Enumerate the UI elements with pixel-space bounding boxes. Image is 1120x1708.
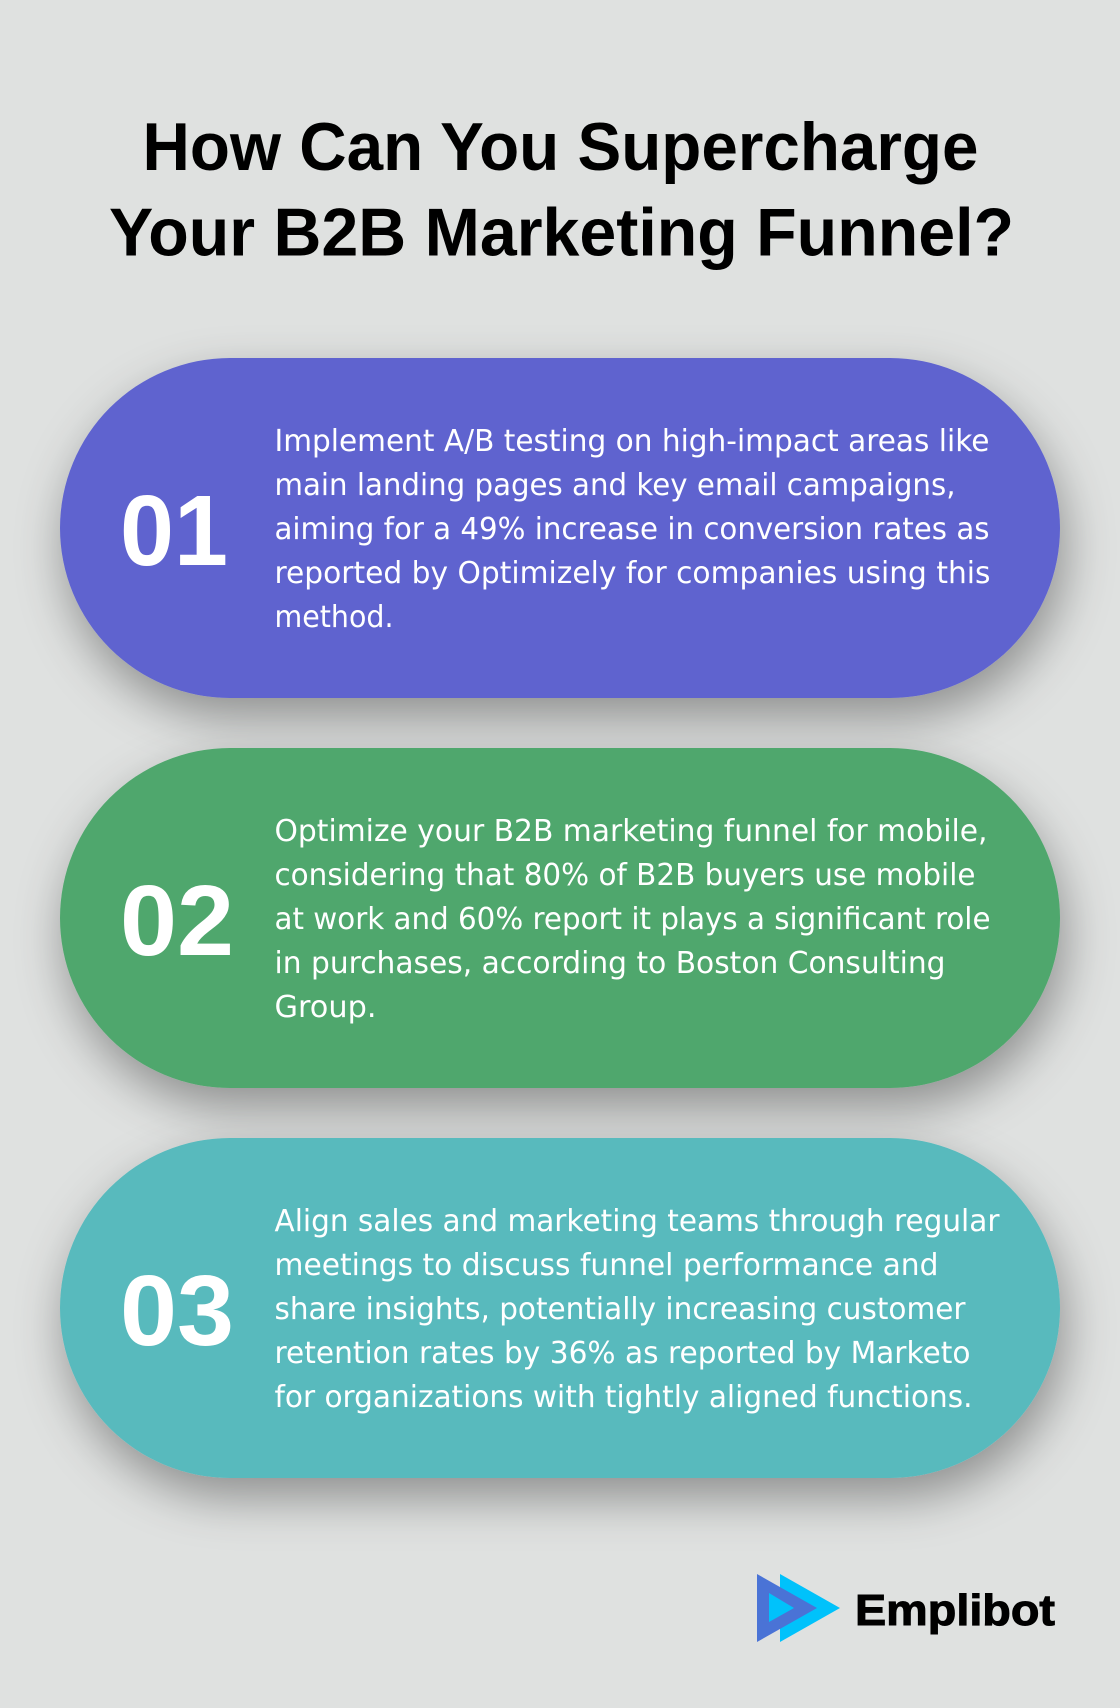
title: How Can You Supercharge — [142, 110, 978, 185]
step 02 text: considering that 80% of B2B buyers use mobile — [274, 858, 976, 893]
step 03 text: for organizations with tightly aligned functions. — [274, 1380, 972, 1415]
step 01 text: method. — [274, 600, 394, 635]
step 01 text: reported by Optimizely for companies using this — [274, 556, 990, 591]
step 03 text: meetings to discuss funnel performance and — [274, 1248, 938, 1283]
step 02 text: Group. — [274, 990, 376, 1025]
step 02 text — [274, 814, 990, 1025]
step 02 text: in purchases, according to Boston Consulting — [274, 946, 946, 981]
logo: Emplibot — [757, 1574, 1055, 1642]
wordmark: Emplibot — [855, 1586, 1055, 1635]
step 02 text: Optimize your B2B marketing funnel for mobile, — [274, 814, 988, 849]
step number 03: 03 — [120, 1255, 234, 1367]
step 03 text — [274, 1204, 1000, 1415]
panel: step 01 — [60, 358, 1060, 698]
step 02 text: at work and 60% report it plays a significant role — [274, 902, 990, 937]
icon: play triangles — [757, 1574, 840, 1642]
title — [109, 110, 1014, 270]
step 01 text: main landing pages and key email campaigns, — [274, 468, 956, 503]
panel: step 03 — [60, 1138, 1060, 1478]
step 01 text — [274, 424, 990, 635]
step 01 text: aiming for a 49% increase in conversion rates as — [274, 512, 990, 547]
step 03 text: retention rates by 36% as reported by Marketo — [274, 1336, 970, 1371]
step 03 text: Align sales and marketing teams through regular — [274, 1204, 1000, 1239]
step 01 text: Implement A/B testing on high-impact areas like — [274, 424, 990, 459]
panel: step 02 — [60, 748, 1060, 1088]
step number 01: 01 — [120, 475, 228, 587]
step 03 text: share insights, potentially increasing customer — [274, 1292, 966, 1327]
title: Your B2B Marketing Funnel? — [109, 196, 1014, 270]
step number 02: 02 — [120, 865, 234, 977]
